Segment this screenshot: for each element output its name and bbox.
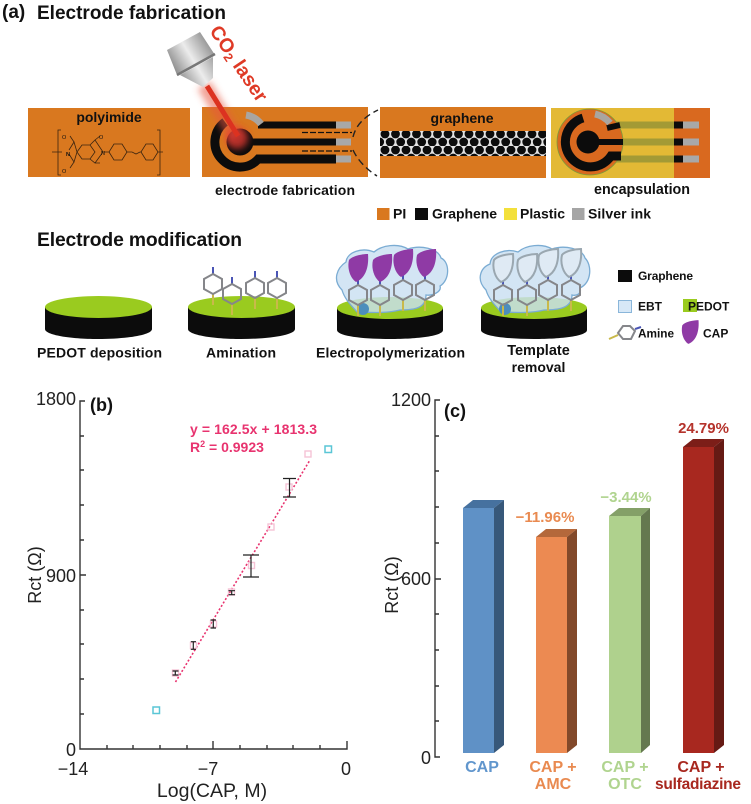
bar: CAP + OTC: CAP + [601,759,649,776]
chart b axes [25,389,351,802]
laser label: laser [225,52,272,106]
disc: amination [188,267,295,339]
heading: electrode modification: Electrode modification [37,230,242,251]
label: removal line: removal [512,359,565,375]
error bars [172,478,296,675]
amine molecules [204,267,286,315]
legend: materials: Graphene [432,206,497,222]
disc: PEDOT deposition [45,296,152,339]
disc: template removal [480,245,590,339]
legend: modification: Amine [638,326,674,340]
legend: modification: EBT [638,300,663,314]
legend: materials: Silver ink [588,206,651,222]
bar: CAP + OTC: OTC [608,776,642,793]
equation: 2 [200,439,205,449]
legend amine icon [609,326,641,339]
laser label: CO [205,21,239,58]
chart b axes: 0 [66,740,76,760]
panel: graphene: graphene [430,110,494,126]
chart b axes: −7 [198,759,218,779]
bar: CAP + sulfadiazine: 24.79% [678,420,729,437]
bar: CAP + AMC: CAP + [529,759,577,776]
chart c axes: 0 [421,748,431,768]
electrode traces [215,115,352,167]
panel: polyimide: polyimide [76,109,142,125]
bar: CAP + AMC: AMC [535,776,572,793]
legend: materials: PI [393,206,406,222]
panel: graphene [380,107,546,178]
chart b axes: 1800 [36,389,76,409]
chart c axes: 600 [401,569,431,589]
panel label b: (b) [90,395,113,415]
bar: CAP + OTC: −3.44% [600,489,652,506]
chart b trend line and points [153,446,332,714]
legend: materials: Plastic [520,206,565,222]
chart b axes: Log(CAP, M) [157,780,267,802]
panel: encapsulation [551,108,710,178]
bar: CAP + sulfadiazine: sulfadiazine [655,776,741,793]
pink data markers [172,451,311,676]
chart c axes: Rct (Ω) [382,556,402,614]
cyan outlier markers [153,446,332,714]
bar: CAP + sulfadiazine: CAP + [677,759,725,776]
bar: CAP + sulfadiazine [655,420,741,793]
caption: encapsulation: encapsulation [594,182,690,198]
panel: polyimide: O [62,135,67,141]
laser label: 2 [220,51,236,64]
legend: modification: CAP [703,326,728,340]
chart c axes [382,390,441,768]
label: electropolymerization: Electropolymerization [316,344,465,360]
label: PEDOT deposition: PEDOT deposition [37,344,162,360]
bar: CAP + OTC [600,489,652,793]
legend: modification: PEDOT [688,300,730,314]
chart b axes: 900 [46,566,76,586]
bar: CAP [463,500,504,776]
label: template removal: Template [507,343,570,359]
caption: electrode fabrication: electrode fabrication [215,182,355,198]
legend: modification [609,269,730,344]
equation [190,421,317,455]
panel: polyimide: O [99,135,104,141]
legend: modification: Graphene [638,269,693,283]
panel label c: (c) [444,401,466,421]
equation: = 0.9923 [205,439,264,455]
equation: R [190,439,200,455]
panel: polyimide: N [66,152,70,158]
bar: CAP + AMC [516,509,577,793]
panel: polyimide: O [62,169,67,175]
icon: CO2 laser nozzle [167,32,248,149]
chart c axes: 1200 [391,390,431,410]
heading: electrode fabrication: Electrode fabrication [37,3,226,24]
panel label a: (a) [2,2,25,23]
legend: materials [377,206,651,222]
EBT cloud with CAP [336,245,448,316]
chart b axes: Rct (Ω) [25,546,45,604]
equation: y = 162.5x + 1813.3 [190,421,317,437]
EBT cloud with cavities [480,245,590,316]
panel: electrode fabrication [202,107,368,177]
chart b axes: 0 [341,759,351,779]
bar: CAP: CAP [465,759,499,776]
chart b axes: −14 [58,759,88,779]
polyimide structure [52,130,163,175]
label: amination: Amination [206,344,276,360]
panel: polyimide: N [101,151,105,157]
disc: electropolymerization [336,245,448,339]
bar: CAP + AMC: −11.96% [516,509,574,526]
panel: polyimide [28,108,190,177]
zoom dashed guide [353,110,378,176]
